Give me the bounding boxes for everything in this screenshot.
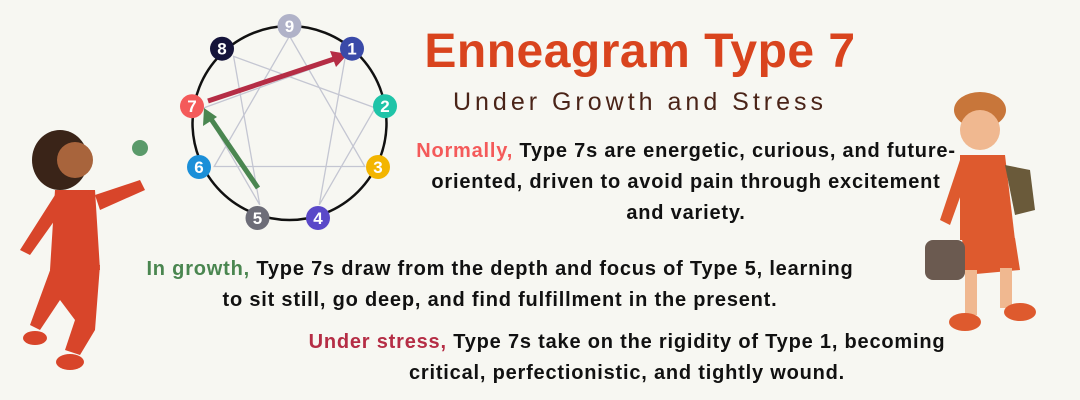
arrow: stress 7 to 1 bbox=[208, 51, 348, 101]
text: normally bbox=[416, 140, 956, 224]
text: normally: and variety. bbox=[626, 202, 746, 224]
points: 7 bbox=[187, 97, 197, 116]
text: stress bbox=[309, 331, 945, 384]
arrow: growth 5 to 7 bbox=[203, 108, 258, 188]
text: growth: to sit still, go deep, and find fulfillment in the present. bbox=[222, 289, 778, 311]
points: 1 bbox=[347, 40, 357, 59]
text: stress: Under stress, Type 7s take on the rigidity of Type 1, becoming bbox=[309, 331, 945, 353]
points bbox=[180, 14, 397, 230]
points: 2 bbox=[380, 97, 390, 116]
points: 6 bbox=[194, 158, 204, 177]
illustration: girl bbox=[20, 130, 148, 370]
points: 5 bbox=[253, 209, 262, 228]
diagram: enneagram bbox=[180, 14, 397, 230]
points: 4 bbox=[313, 209, 323, 228]
text: normally: Normally, Type 7s are energetic, curious, and future- bbox=[416, 140, 956, 162]
text: growth bbox=[146, 258, 854, 311]
text: normally: oriented, driven to avoid pain through excitement bbox=[431, 171, 941, 193]
points: 8 bbox=[217, 40, 227, 59]
text: growth: In growth, Type 7s draw from the depth and focus of Type 5, learning bbox=[146, 258, 854, 280]
subtitle: Under Growth and Stress bbox=[453, 88, 827, 116]
points: 9 bbox=[285, 17, 294, 36]
points: 3 bbox=[373, 158, 383, 177]
title: Enneagram Type 7 bbox=[424, 25, 856, 78]
text: stress: critical, perfectionistic, and tightly wound. bbox=[409, 362, 845, 384]
illustration: boy bbox=[925, 92, 1036, 331]
